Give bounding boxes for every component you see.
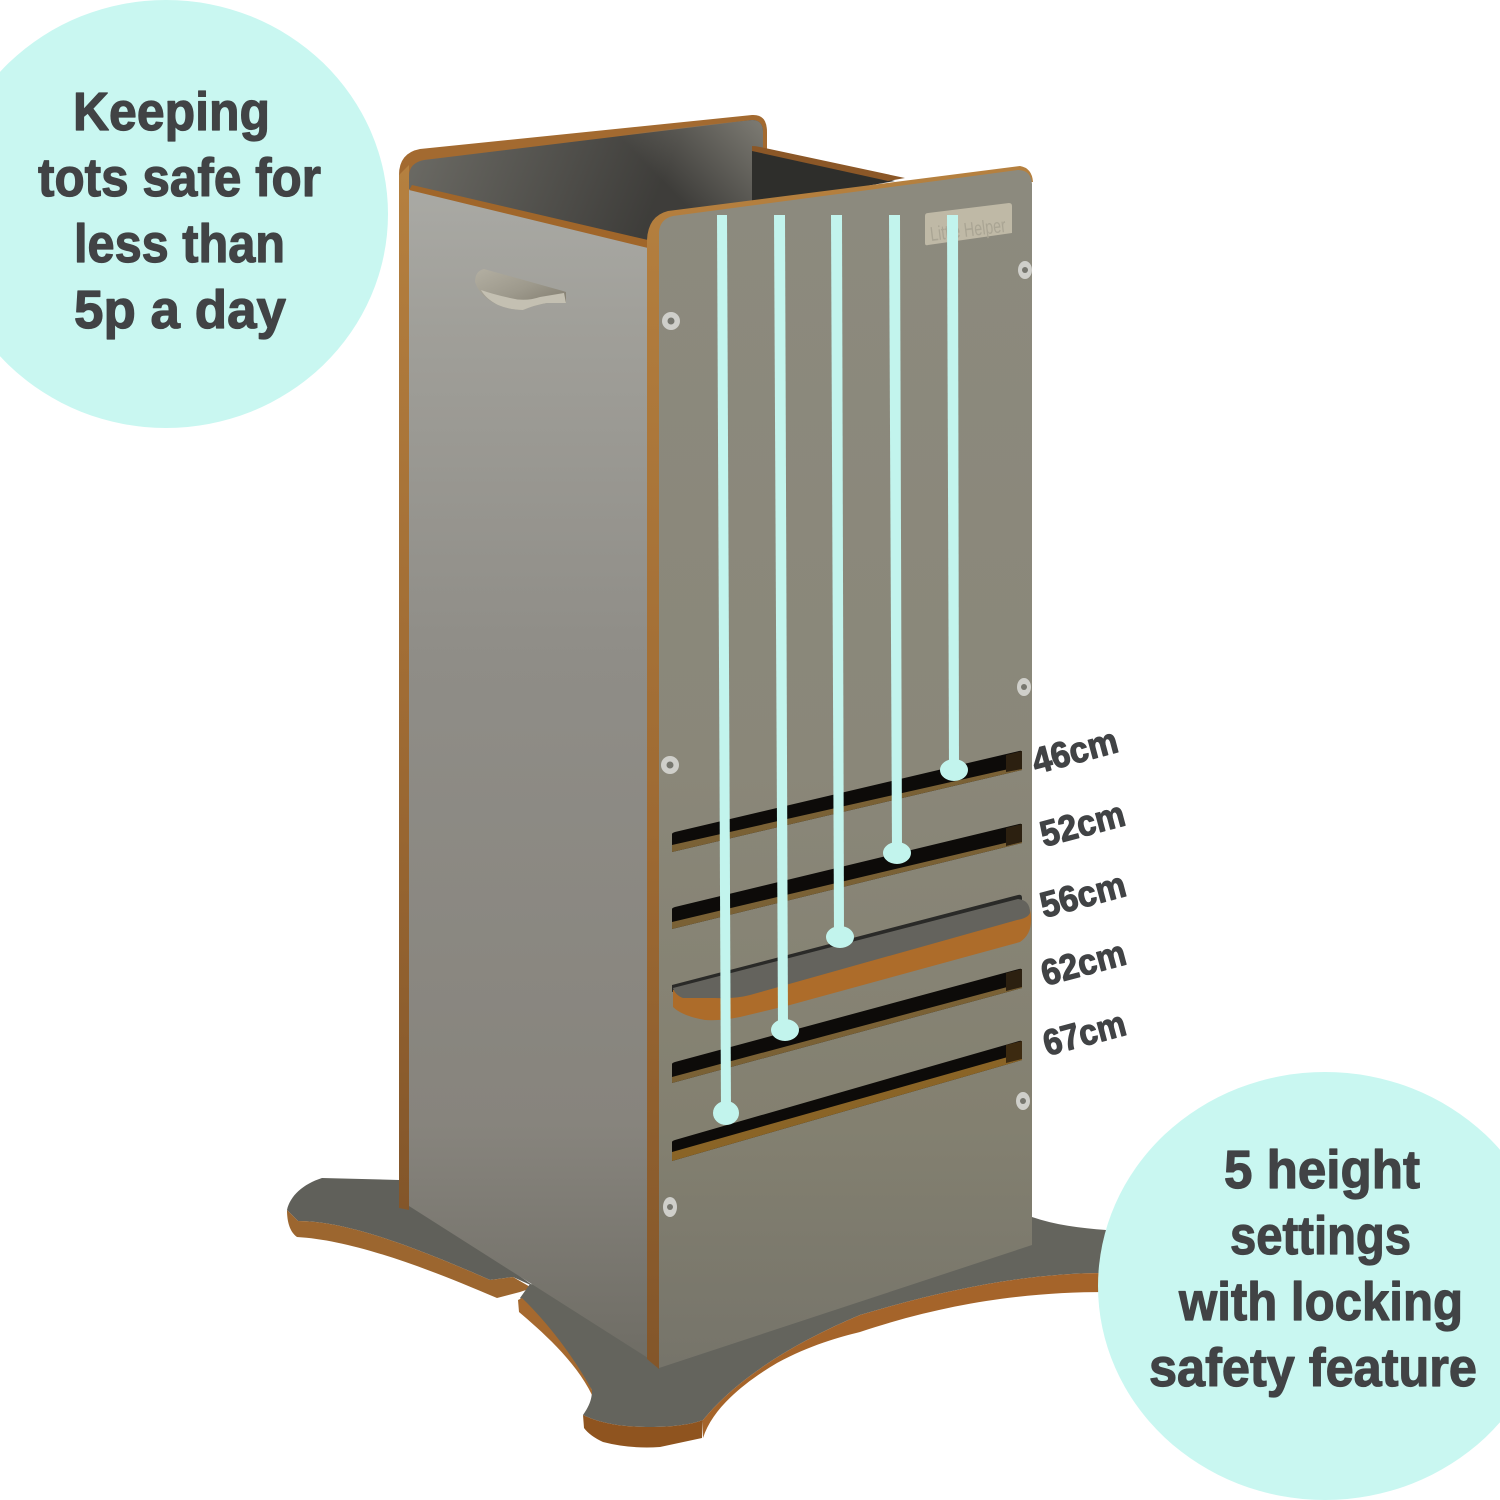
side panel top edge xyxy=(409,185,648,248)
slot 1 xyxy=(672,751,1022,852)
right panel top edge xyxy=(752,146,905,181)
slot 2 xyxy=(672,824,1022,929)
callout text: settings xyxy=(1149,1140,1477,1398)
tower stand illustration xyxy=(287,115,1106,1447)
slot 4 xyxy=(672,969,1022,1083)
front corner edge xyxy=(647,166,1033,1369)
callout text: cost: 5p a day xyxy=(74,280,286,340)
screw: mid left xyxy=(661,756,679,774)
plaque xyxy=(925,203,1012,246)
slot 3 behind shelf xyxy=(672,895,1022,992)
label 46cm: 46cm xyxy=(1027,720,1122,782)
step shelf xyxy=(673,899,1031,1020)
line: 46cm xyxy=(940,215,968,781)
label 62cm: 62cm xyxy=(1036,932,1130,994)
callout text: cost: less than xyxy=(74,214,285,274)
handle xyxy=(475,269,566,310)
callout text: cost: tots safe for xyxy=(38,148,321,208)
base: back left foot xyxy=(287,1178,535,1298)
back panel xyxy=(399,115,767,245)
callout circle: height settings xyxy=(1098,1072,1500,1500)
screw: top left xyxy=(662,312,680,330)
slot 5 xyxy=(672,1041,1022,1161)
base: front foot xyxy=(518,1217,1106,1447)
left edge strip xyxy=(399,165,409,1210)
screw: low left xyxy=(663,1197,677,1217)
callout text: settings: 5 height xyxy=(1224,1140,1420,1200)
label 52cm: 52cm xyxy=(1035,793,1129,855)
callout text: settings: safety feature xyxy=(1149,1338,1477,1398)
line: 56cm xyxy=(826,215,854,948)
callout circle: keeping tots safe xyxy=(0,0,388,428)
interior dark corner xyxy=(752,150,895,206)
front panel xyxy=(659,170,1032,1368)
line: 52cm xyxy=(883,215,911,864)
screw: low right xyxy=(1016,1092,1030,1110)
height indicator lines xyxy=(713,215,968,1125)
callout text: settings: settings xyxy=(1230,1206,1411,1266)
screw: top right xyxy=(1018,261,1032,279)
side panel xyxy=(409,189,648,1358)
line: 67cm xyxy=(713,215,739,1125)
line: 62cm xyxy=(771,215,799,1041)
label 67cm: 67cm xyxy=(1038,1002,1130,1064)
callout text: cost: Keeping xyxy=(73,82,270,142)
label 56cm: 56cm xyxy=(1035,864,1130,926)
height labels xyxy=(1027,720,1130,1064)
callout text: settings: with locking xyxy=(1178,1272,1463,1332)
screw: mid right xyxy=(1017,678,1031,696)
callout text: cost xyxy=(38,82,321,340)
plaque: Little Helper xyxy=(929,215,1007,246)
